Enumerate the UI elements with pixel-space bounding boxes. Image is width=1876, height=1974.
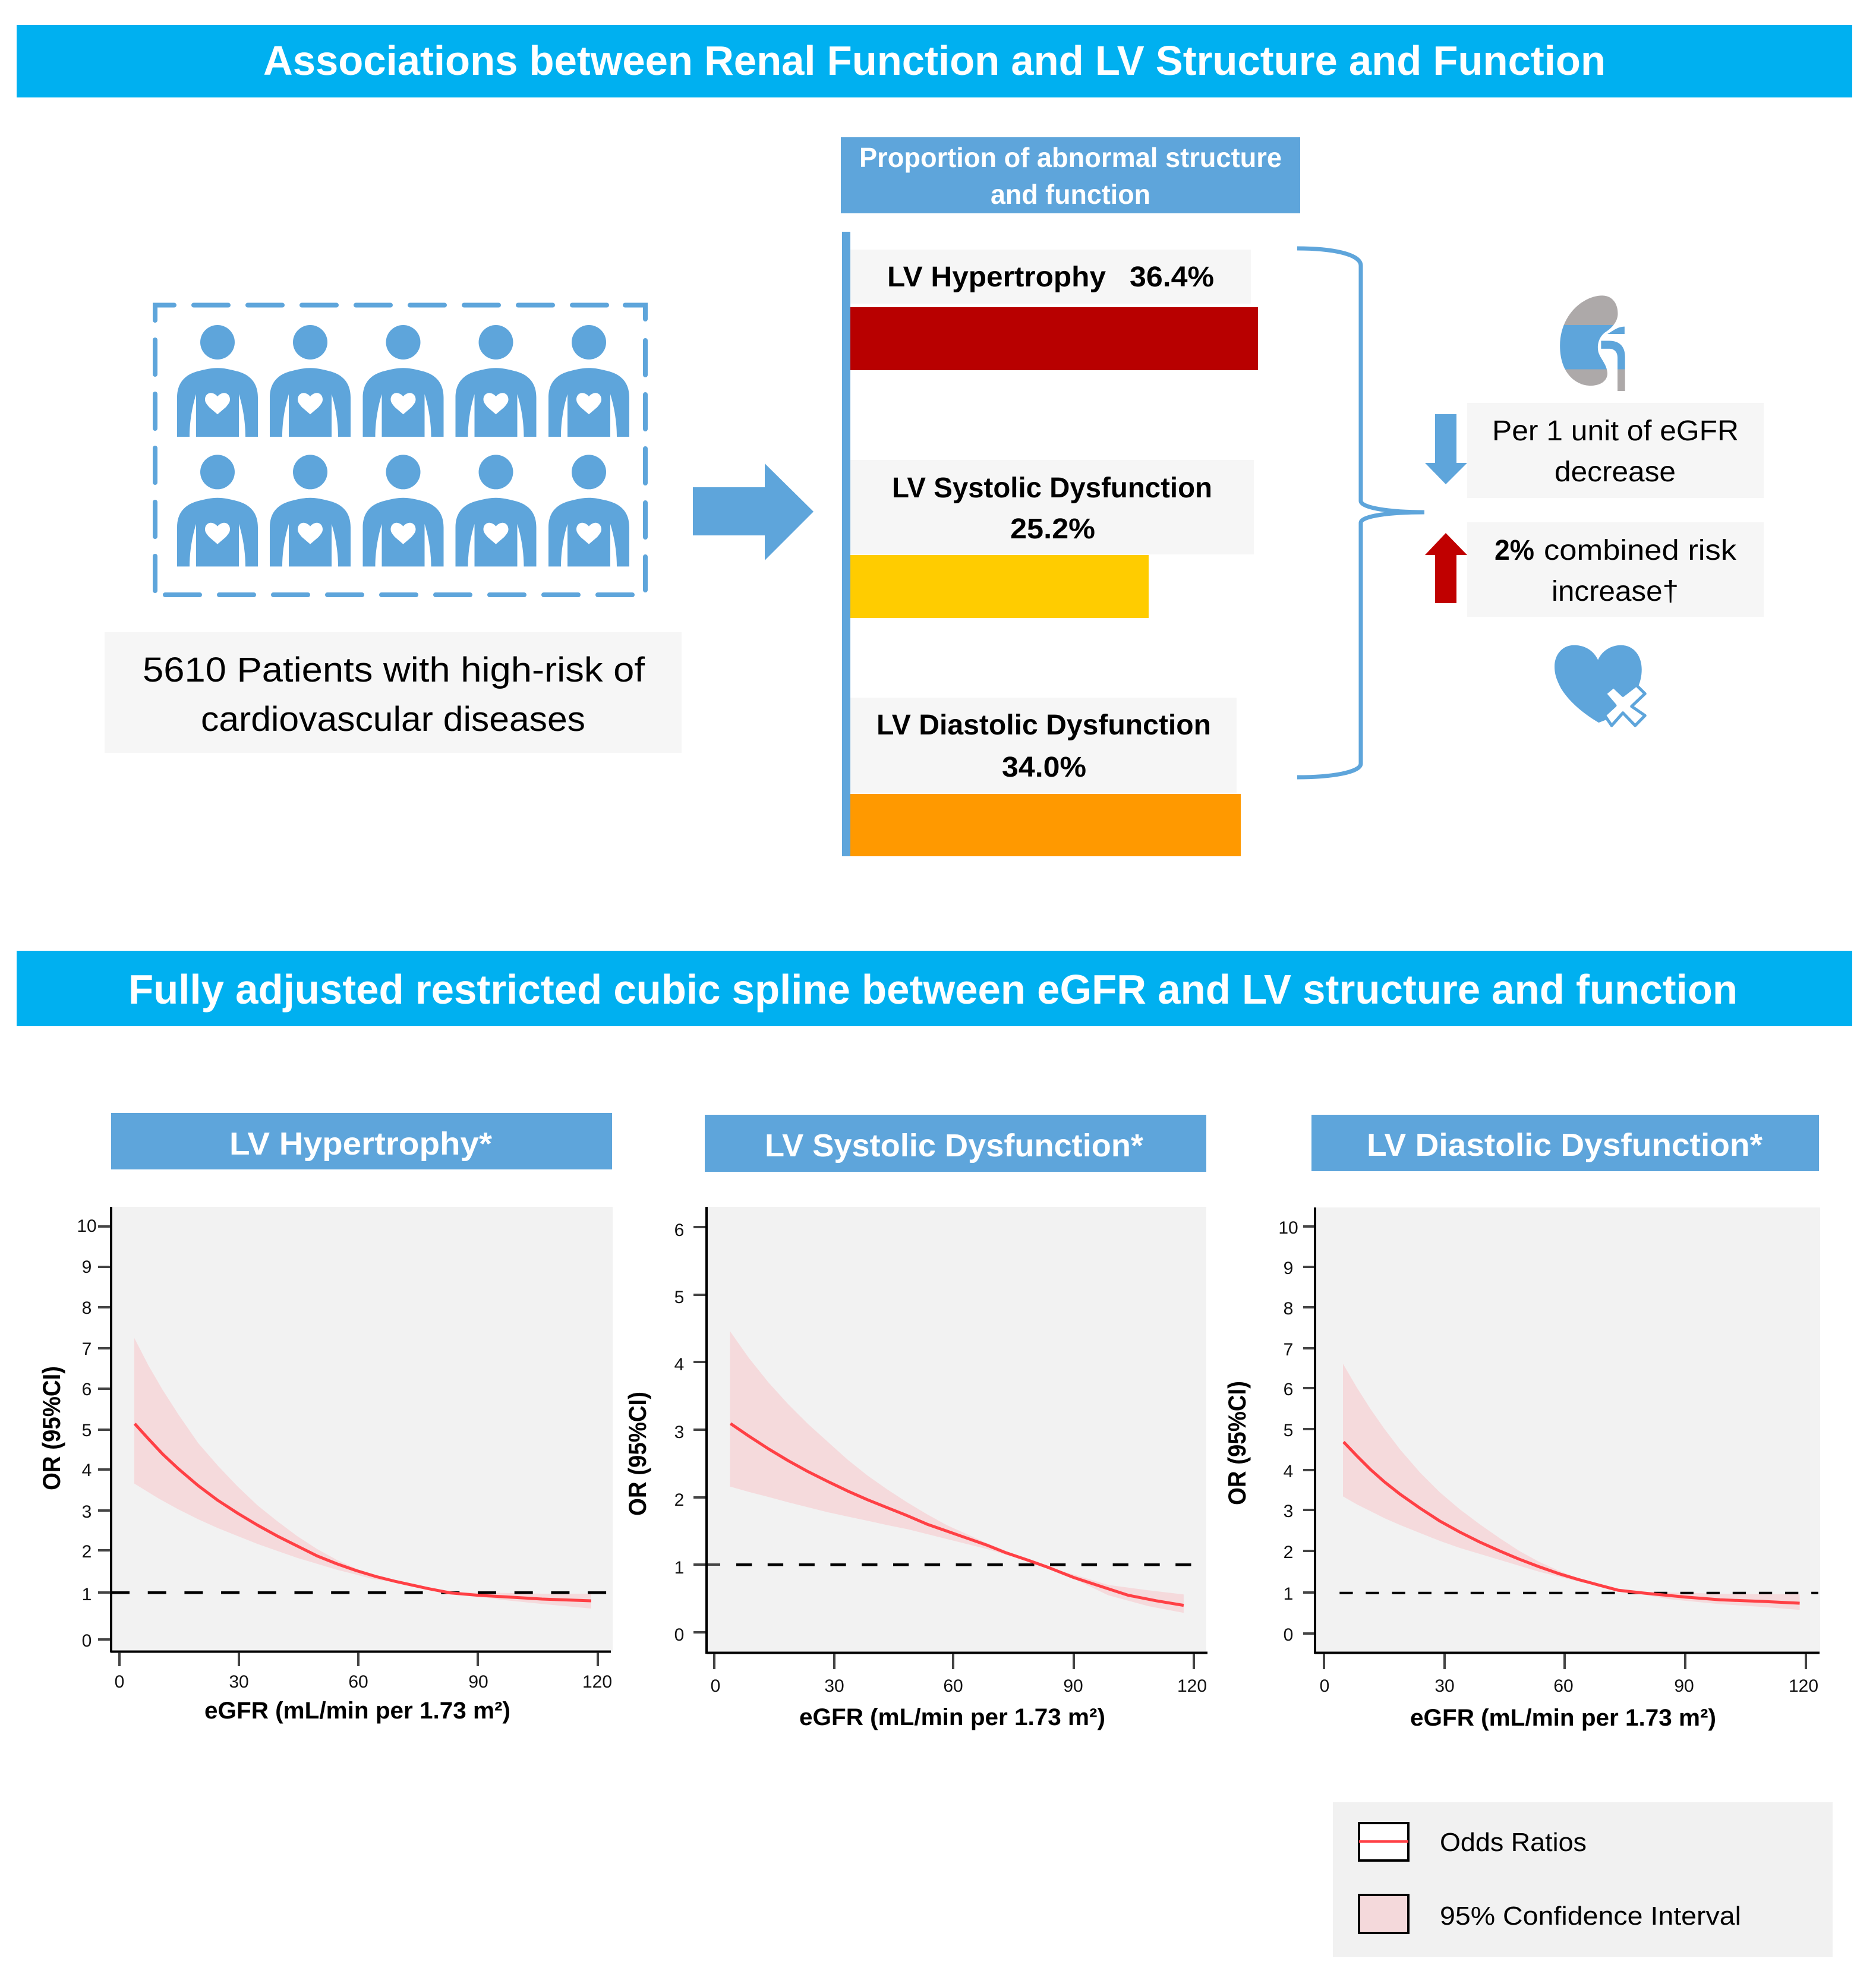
heading: LV systolic dysfunction: LV Systolic Dysfunction*	[765, 1128, 1143, 1163]
y axis title: OR (95%CI)	[1223, 1381, 1251, 1505]
heading: LV systolic dysfunction	[705, 1115, 1206, 1172]
y tick labels: 3	[82, 1502, 92, 1522]
y tick labels: 7	[82, 1339, 92, 1359]
panel: patient population	[105, 305, 682, 753]
y axis	[98, 1207, 111, 1653]
y tick labels: 4	[674, 1355, 684, 1374]
y tick labels: 5	[1284, 1421, 1293, 1440]
legend item: confidence interval: 95% Confidence Interval	[1440, 1902, 1741, 1931]
x tick labels: 0	[115, 1672, 124, 1692]
icon: dashed border around patients	[155, 305, 645, 595]
icon: curly brace	[1297, 248, 1424, 777]
y axis	[1303, 1207, 1315, 1654]
bar: LV hypertrophy	[850, 250, 1258, 370]
axis bar	[842, 232, 850, 856]
x axis title: eGFR (mL/min per 1.73 m²)	[1410, 1705, 1716, 1731]
odds ratio curve	[135, 1424, 591, 1601]
icon: patient row 1	[177, 325, 629, 437]
y tick labels: 3	[1284, 1502, 1293, 1521]
bar: LV diastolic dysfunction	[850, 698, 1241, 856]
y tick labels: 8	[1284, 1299, 1293, 1319]
y tick labels: 3	[674, 1423, 684, 1442]
panel: LV diastolic dysfunction spline chart	[1223, 1115, 1820, 1731]
y tick labels: 5	[674, 1288, 684, 1307]
text: combined risk increase: increase†	[1552, 576, 1679, 607]
x tick labels: 60	[348, 1672, 368, 1692]
y tick labels: 1	[674, 1558, 684, 1578]
text: per unit eGFR: decrease	[1555, 456, 1676, 488]
x tick labels: 60	[1553, 1676, 1574, 1696]
y tick labels: 6	[82, 1380, 92, 1399]
banner: associations title: Associations between Renal Function and LV Structure and Function	[263, 37, 1606, 84]
x axis title: eGFR (mL/min per 1.73 m²)	[204, 1698, 510, 1724]
heading: LV diastolic dysfunction	[1311, 1115, 1819, 1171]
y tick labels: 2	[82, 1542, 92, 1562]
plot background	[1315, 1207, 1820, 1653]
banner: spline title	[17, 951, 1852, 1026]
x tick labels: 30	[824, 1676, 844, 1696]
legend item: odds ratios: Odds Ratios	[1440, 1828, 1587, 1857]
heading: LV diastolic dysfunction: LV Diastolic Dysfunction*	[1367, 1127, 1763, 1163]
y tick labels: 2	[1284, 1543, 1293, 1562]
y tick labels	[77, 1216, 97, 1651]
text: combined risk increase	[1467, 522, 1764, 617]
x tick labels: 60	[943, 1676, 963, 1696]
y tick labels: 1	[1284, 1584, 1293, 1604]
y tick labels: 9	[82, 1257, 92, 1277]
bar: LV diastolic dysfunction: 34.0%	[1002, 752, 1086, 783]
panel: LV hypertrophy spline chart	[37, 1113, 613, 1724]
heading: LV hypertrophy	[111, 1113, 612, 1169]
x axis	[111, 1652, 611, 1666]
y tick labels	[1278, 1218, 1298, 1645]
y tick labels: 10	[1278, 1218, 1298, 1238]
y tick labels: 8	[82, 1298, 92, 1318]
text: combined risk increase: 2%	[1495, 535, 1534, 566]
y tick labels: 6	[1284, 1380, 1293, 1399]
bar: LV diastolic dysfunction: LV Diastolic Dysfunction	[876, 709, 1211, 741]
y tick labels	[674, 1221, 684, 1645]
y tick labels: 2	[674, 1490, 684, 1510]
y tick labels: 1	[82, 1585, 92, 1604]
y tick labels: 7	[1284, 1340, 1293, 1360]
y tick labels: 0	[674, 1625, 684, 1645]
x tick labels: 120	[1177, 1676, 1207, 1696]
icon: kidney	[1560, 295, 1625, 391]
y tick labels: 4	[82, 1461, 92, 1480]
x tick labels	[1320, 1676, 1818, 1696]
x tick labels	[711, 1676, 1207, 1696]
arrow: eGFR decrease	[1425, 414, 1467, 484]
heading: proportion	[841, 137, 1300, 213]
odds ratio curve	[730, 1424, 1184, 1606]
confidence band	[134, 1338, 591, 1609]
x tick labels: 90	[468, 1672, 488, 1692]
bar: LV hypertrophy: LV Hypertrophy	[887, 261, 1106, 293]
x axis	[1315, 1653, 1820, 1669]
x tick labels: 30	[1434, 1676, 1455, 1696]
x tick labels: 90	[1063, 1676, 1083, 1696]
y tick labels: 6	[674, 1221, 684, 1240]
bar: LV systolic dysfunction: 25.2%	[1010, 513, 1095, 545]
text: combined risk increase: combined risk	[1544, 535, 1737, 566]
x tick labels: 120	[1789, 1676, 1818, 1696]
heading: LV hypertrophy: LV Hypertrophy*	[229, 1126, 492, 1162]
text: per unit eGFR: Per 1 unit of eGFR	[1492, 415, 1739, 447]
legend	[1333, 1802, 1833, 1957]
heading: proportion: Proportion of abnormal structure	[859, 142, 1282, 173]
text: patient count: cardiovascular diseases	[201, 700, 585, 739]
x axis	[707, 1653, 1207, 1669]
x axis title: eGFR (mL/min per 1.73 m²)	[799, 1704, 1105, 1730]
bar: LV systolic dysfunction	[850, 460, 1254, 618]
reference line at OR 1	[736, 1563, 1193, 1566]
y tick labels: 10	[77, 1216, 97, 1236]
legend item: confidence interval	[1359, 1895, 1741, 1933]
bar: LV hypertrophy: 36.4%	[1130, 261, 1214, 293]
reference line at OR 1	[111, 1591, 607, 1594]
icon: patient row 2	[177, 455, 629, 566]
legend item: odds ratios	[1359, 1823, 1587, 1861]
confidence band	[730, 1331, 1184, 1613]
y axis title: OR (95%CI)	[37, 1366, 65, 1490]
odds ratio curve	[1344, 1442, 1800, 1603]
text: per unit eGFR	[1467, 403, 1764, 498]
plot background	[707, 1207, 1206, 1653]
icon: heart with cross	[1555, 645, 1645, 726]
text: patient count	[105, 632, 682, 753]
plot background	[111, 1207, 613, 1651]
y tick labels: 9	[1284, 1259, 1293, 1278]
heading: proportion: and function	[991, 179, 1150, 210]
banner: associations title	[17, 25, 1852, 97]
arrow: risk increase	[1425, 533, 1467, 603]
y axis	[693, 1207, 720, 1654]
x tick labels: 90	[1674, 1676, 1694, 1696]
x tick labels: 30	[229, 1672, 249, 1692]
panel: risk summary	[1425, 295, 1764, 726]
x tick labels: 120	[582, 1672, 612, 1692]
confidence band	[1343, 1364, 1800, 1610]
panel: proportion of abnormal structure and function	[841, 137, 1300, 856]
banner: spline title: Fully adjusted restricted cubic spline between eGFR and LV structure and function	[128, 966, 1738, 1013]
x tick labels: 0	[1320, 1676, 1329, 1696]
reference line at OR 1	[1339, 1592, 1818, 1594]
y axis title: OR (95%CI)	[623, 1392, 651, 1516]
y tick labels: 0	[1284, 1625, 1293, 1645]
text: patient count: 5610 Patients with high-risk of	[143, 651, 645, 689]
arrow: patients to proportions	[693, 463, 814, 560]
y tick labels: 5	[82, 1421, 92, 1440]
x tick labels	[115, 1672, 612, 1692]
x tick labels: 0	[711, 1676, 720, 1696]
y tick labels: 4	[1284, 1462, 1293, 1481]
y tick labels: 0	[82, 1631, 92, 1651]
panel: LV systolic dysfunction spline chart	[623, 1115, 1207, 1730]
bar: LV systolic dysfunction: LV Systolic Dysfunction	[892, 472, 1212, 504]
